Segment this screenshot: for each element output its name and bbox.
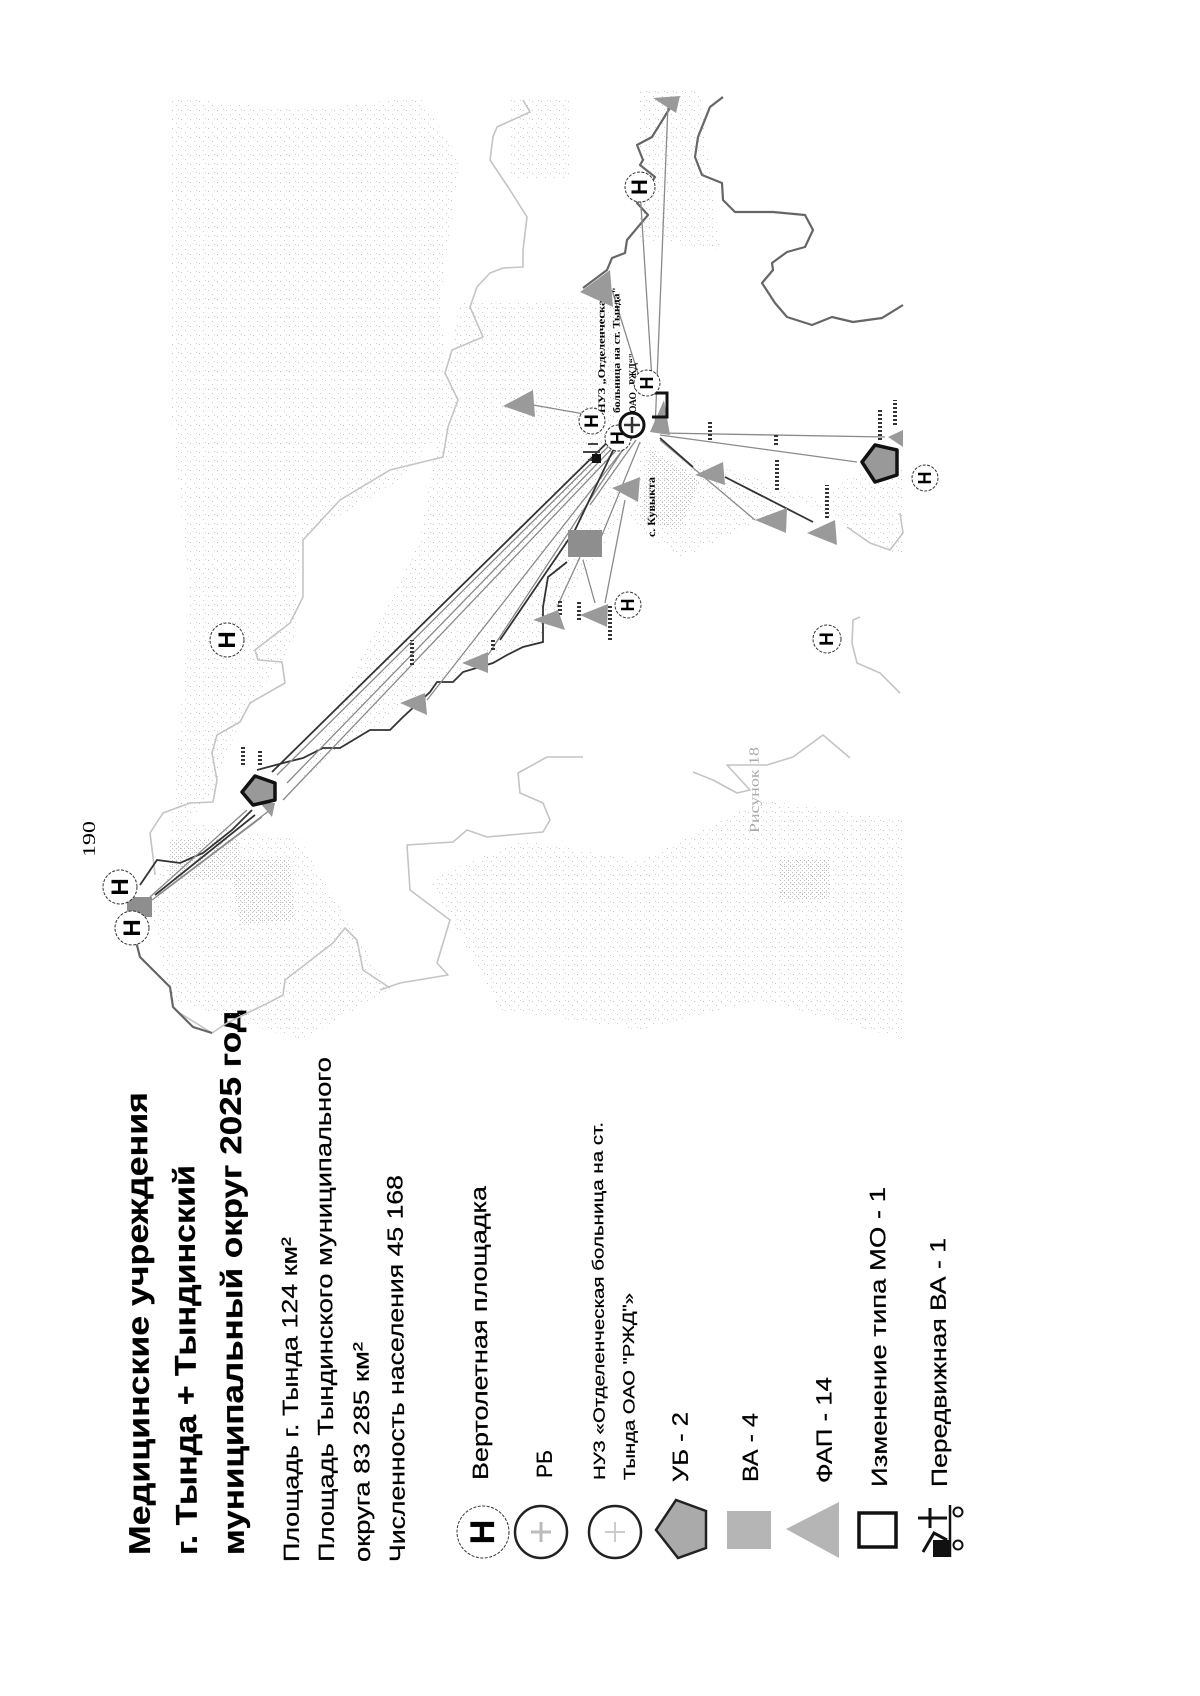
legend: railway hospital: НУЗ «Отделенческая больница на ст. [590,1122,609,1480]
legend: helipad: H [464,1520,502,1544]
РБ hub label [596,287,639,413]
legend: helipad: Вертолетная площадка [466,1185,493,1480]
legend: type change [859,1187,896,1547]
legend: feldsher station: ФАП - 14 [811,1377,837,1483]
legend: regional hospital: РБ [532,1450,557,1478]
settlement label: с. Кувыкта [646,476,658,537]
РБ hub label: НУЗ „Отделенческая [596,292,608,413]
area and population text block: Численность населения 45 168 [382,1175,410,1562]
legend: outpatient clinic [727,1413,771,1549]
map speckle background [150,90,905,1040]
legend: district hospital [656,1412,706,1558]
helipad icons: H [817,632,838,646]
legend: railway hospital [589,1122,641,1558]
map [103,90,938,1040]
facilities: district hospitals [242,445,897,805]
legend: mobile unit: Передвижная ВА - 1 [925,1238,952,1487]
area and population text block: округа 83 285 км² [348,1342,375,1562]
mobile unit on map [583,444,601,463]
legend: regional hospital [515,1450,567,1558]
helipad icons: H [608,431,629,445]
area and population text block [277,1057,410,1562]
legend: helipad [457,1185,509,1558]
hub regional hospital [620,413,644,437]
legend: railway hospital: Тында ОАО "РЖД"» [621,1293,639,1480]
legend: feldsher station [786,1377,839,1558]
legend: mobile unit [918,1238,962,1557]
helipad icons: H [582,414,603,428]
helipad icons: H [119,919,146,937]
title [121,1010,251,1555]
type change square [643,393,667,417]
light district borders [150,100,903,1033]
main border [133,97,903,1033]
legend: type change: Изменение типа МО - 1 [865,1187,892,1487]
helipad icons: H [618,598,638,612]
legend: outpatient clinic: ВА - 4 [738,1413,763,1482]
legend [457,1122,962,1558]
small settlement labels [243,400,895,765]
РБ hub label: ОАО „РЖД“" [628,353,639,413]
figure caption: Рисунок 18 [748,747,763,833]
helipad icons: H [637,376,657,390]
helipad icons: H [627,179,652,195]
page number: 190 [79,821,99,857]
helipad icons: H [214,631,241,649]
helipad icons [103,172,938,945]
title: г. Тында + Тындинский [168,1165,204,1555]
facilities: feldsher stations [260,96,903,817]
РБ hub label: больница на ст. Тында" [611,287,623,413]
facilities: squares [127,530,602,917]
legend: district hospital: УБ - 2 [668,1412,693,1482]
title: муниципальный округ 2025 год [214,1010,251,1555]
title: Медицинские учреждения [121,1092,157,1555]
helipad icons: H [107,878,134,896]
route lines [150,105,885,900]
area and population text block: Площадь Тындинского муниципального [310,1057,339,1562]
area and population text block: Площадь г. Тында 124 км² [277,1237,304,1562]
helipad icons: H [915,472,935,484]
